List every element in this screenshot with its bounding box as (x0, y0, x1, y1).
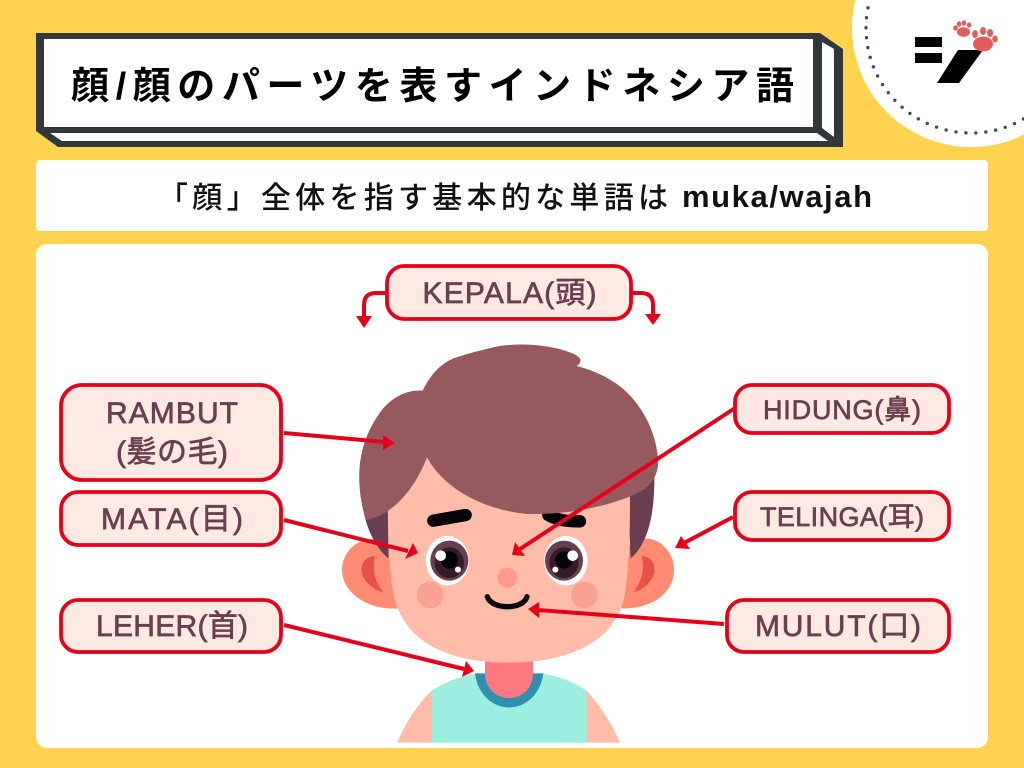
label: KEPALA with arrows (356, 266, 661, 328)
title banner (36, 33, 843, 147)
back hair (360, 473, 388, 558)
eyebrows (433, 515, 466, 521)
mouth (487, 597, 527, 607)
main diagram panel (36, 244, 988, 748)
label: HIDUNG (735, 385, 949, 433)
label: MATA (61, 492, 281, 545)
label: RAMBUT (61, 385, 281, 480)
arrow: MULUT (528, 602, 724, 624)
label: RAMBUT: RAMBUT (106, 397, 238, 430)
face (388, 440, 630, 663)
label: TELINGA: TELINGA(耳) (760, 502, 924, 532)
arrow: MATA (284, 520, 418, 559)
label: TELINGA (735, 492, 949, 540)
arrow: LEHER (284, 625, 474, 677)
label: MULUT: MULUT(口) (755, 610, 921, 643)
hair (359, 345, 658, 520)
label: HIDUNG: HIDUNG(鼻) (763, 395, 921, 425)
ears (342, 539, 403, 609)
boy illustration (342, 345, 674, 743)
label: LEHER (61, 600, 281, 652)
nose (497, 568, 517, 588)
subtitle panel (36, 160, 988, 231)
eyes (426, 536, 588, 585)
cheeks (417, 582, 443, 608)
label: MULUT (727, 600, 949, 652)
label: RAMBUT: (髪の毛) (116, 436, 228, 469)
subtitle text (158, 179, 872, 215)
arrow: RAMBUT (284, 433, 395, 450)
title text: 顔/顔のパーツを表すインドネシア語 (71, 66, 794, 108)
label: LEHER: LEHER(首) (96, 610, 248, 643)
body (397, 691, 440, 743)
logo badge (852, 0, 1024, 147)
label: MATA: MATA(目) (101, 503, 243, 536)
label: KEPALA with arrows: KEPALA(頭) (422, 277, 596, 310)
subtitle text: 「顔」全体を指す基本的な単語は (158, 182, 668, 215)
arrow: HIDUNG (512, 408, 735, 556)
subtitle text: muka/wajah (682, 179, 872, 214)
arrow: TELINGA (675, 517, 733, 549)
